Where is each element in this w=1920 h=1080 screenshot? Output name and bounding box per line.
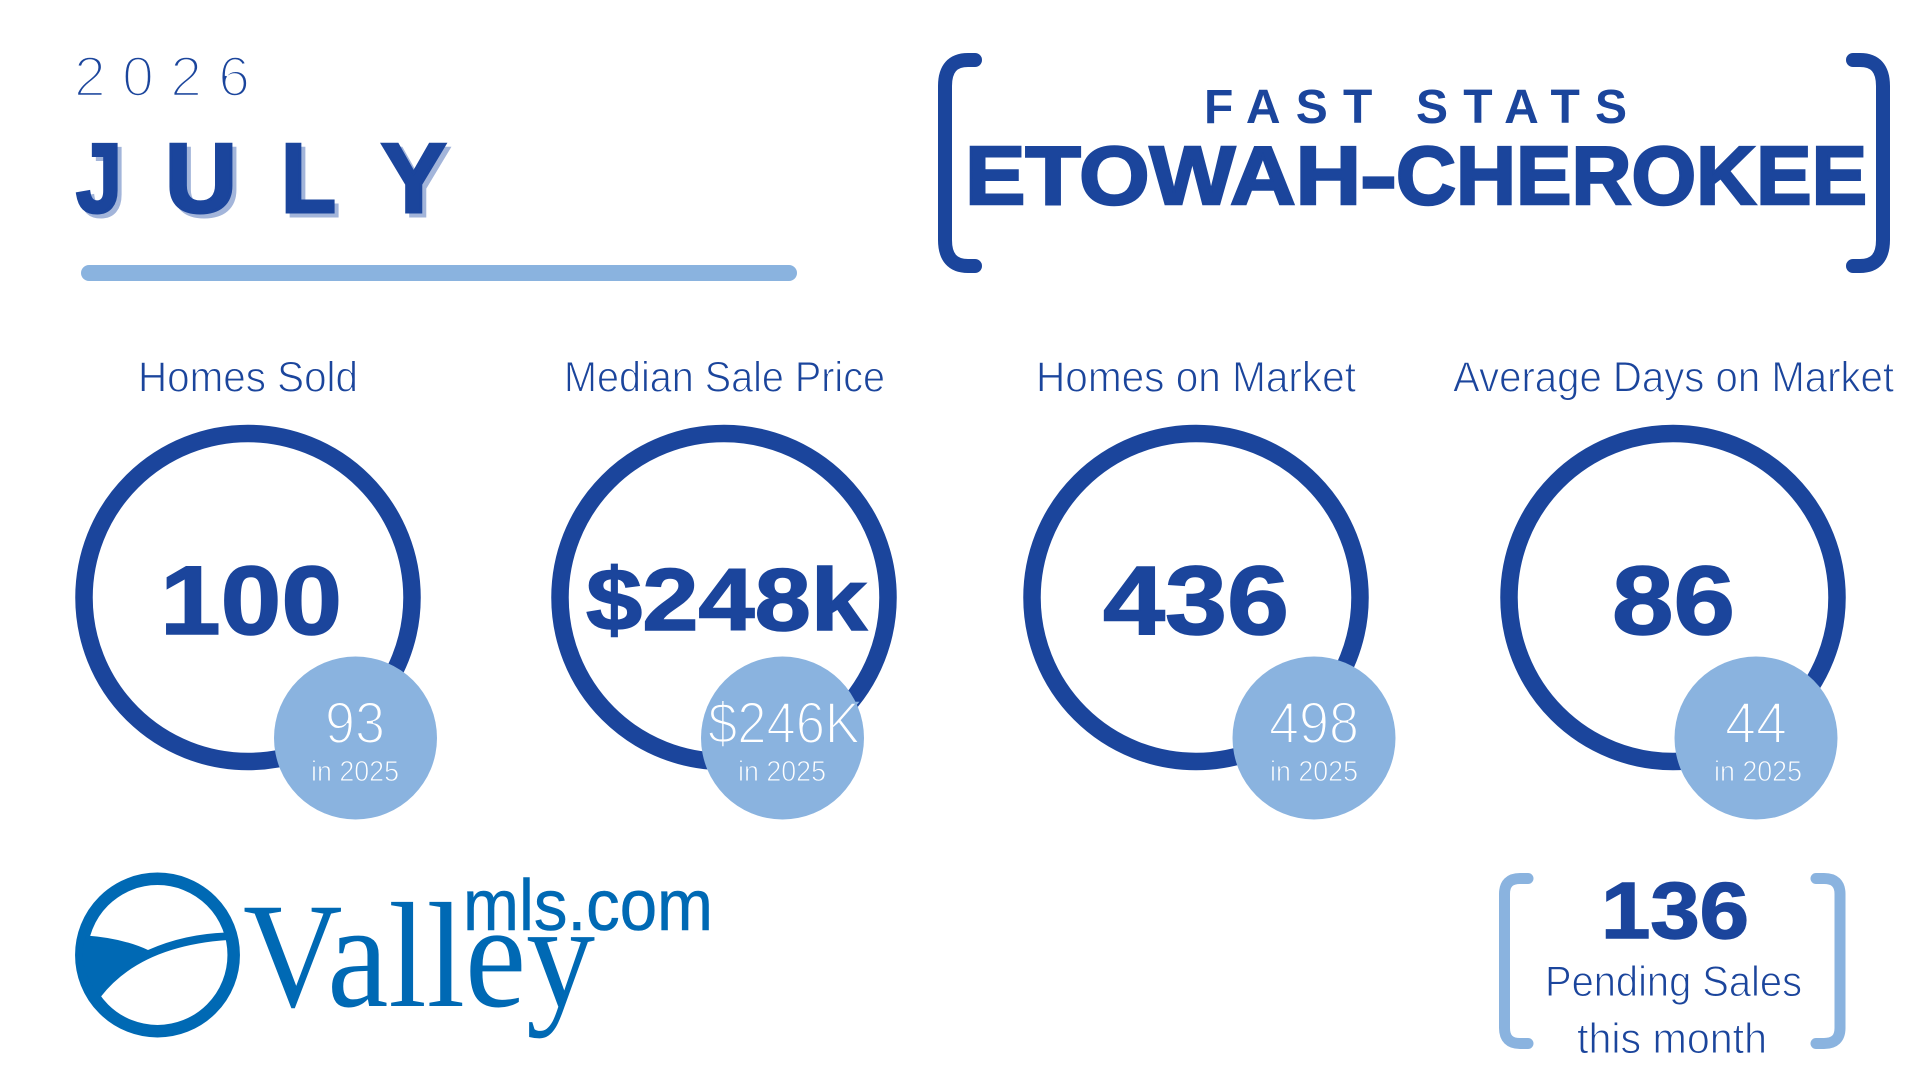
month title: JULY (76, 123, 450, 237)
logo wordmark: mls.com: mls.com (463, 866, 713, 946)
pending sales callout (1504, 866, 1840, 1063)
comparison badge: median sale price (701, 656, 864, 820)
bracket: right (1816, 878, 1840, 1044)
month title: JULY: J (80, 127, 126, 237)
comparison badge: median sale price: in 2025 (738, 756, 826, 788)
label: pending sales: Pending Sales (1545, 958, 1802, 1006)
comparison badge: average days on market (1674, 656, 1838, 820)
month title: JULY: L (285, 127, 340, 237)
comparison badge: median sale price: $246K (708, 691, 860, 756)
value: homes on market: 436 (1103, 546, 1289, 655)
ring: homes on market (1032, 434, 1360, 762)
label: this month: this month (1577, 1015, 1767, 1063)
logo: Valley mls.com (81, 866, 713, 1039)
month title: JULY: J (76, 123, 122, 233)
label: homes sold: Homes Sold (138, 354, 358, 402)
value: median sale price: $248k (586, 550, 868, 649)
month title: JULY: U (169, 127, 241, 237)
year: 2026 (74, 45, 250, 109)
region name: CHEROKEE (1396, 129, 1867, 222)
ring: homes sold (84, 434, 412, 762)
comparison badge: homes sold (274, 656, 437, 820)
bracket: left (1504, 878, 1528, 1044)
value: homes sold: 100 (160, 546, 342, 655)
region name (965, 129, 1867, 222)
value: average days on market: 86 (1612, 546, 1735, 655)
month title: JULY: L (281, 123, 336, 233)
month title: JULY: U (165, 123, 237, 233)
heading bracket: left (945, 60, 975, 266)
stat panel: average days on market (1453, 354, 1894, 820)
stat panel: median sale price (560, 354, 888, 820)
stat panel: homes on market (1032, 354, 1396, 820)
comparison badge: average days on market: in 2025 (1714, 756, 1802, 788)
subtitle: FAST STATS: FAST STATS (1204, 81, 1627, 134)
label: median sale price: Median Sale Price (564, 354, 885, 402)
comparison badge: homes sold: 93 (325, 691, 385, 756)
logo wordmark: Valley: Valley (243, 873, 595, 1039)
month title: JULY: Y (381, 123, 446, 233)
ring: median sale price (560, 434, 888, 762)
value: pending sales: 136 (1601, 866, 1749, 955)
comparison badge: homes on market (1232, 656, 1396, 820)
ring: average days on market (1509, 434, 1837, 762)
logo icon: valley ring (81, 879, 234, 1031)
title underline bar (81, 265, 797, 281)
comparison badge: homes on market: in 2025 (1270, 756, 1358, 788)
comparison badge: homes sold: in 2025 (311, 756, 399, 788)
heading bracket: right (1853, 60, 1883, 266)
region name: - (1360, 129, 1397, 222)
label: average days on market: Average Days on Market (1453, 354, 1894, 402)
comparison badge: homes on market: 498 (1269, 691, 1359, 756)
comparison badge: average days on market: 44 (1725, 691, 1787, 756)
month title: JULY: Y (385, 127, 450, 237)
stat panel: homes sold (84, 354, 437, 820)
label: homes on market: Homes on Market (1036, 354, 1356, 402)
region name: ETOWAH (965, 129, 1361, 222)
